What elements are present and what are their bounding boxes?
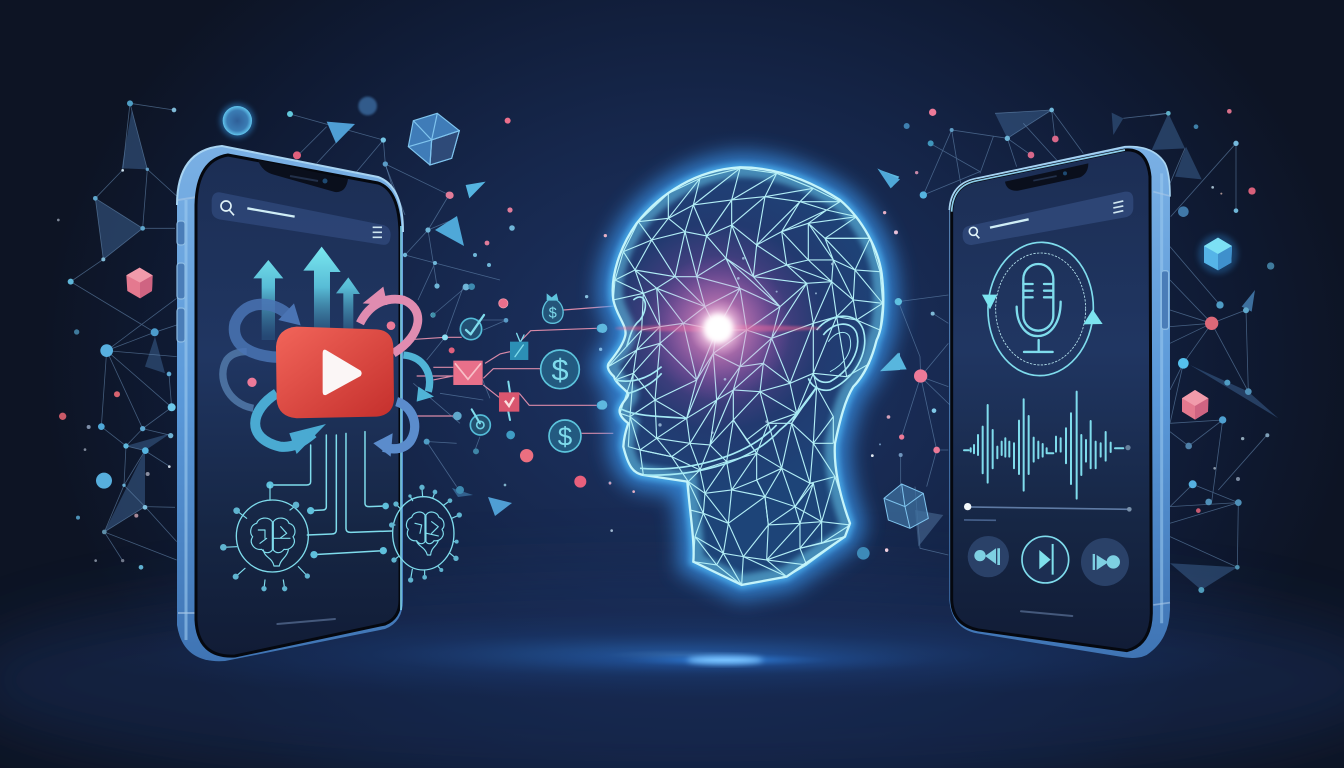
- network: inner right: [871, 295, 950, 555]
- icon: dollar coin small: [549, 420, 581, 452]
- triangle mesh: [608, 168, 883, 585]
- icon: pink check card: [499, 382, 519, 420]
- icon: envelope: [453, 361, 483, 385]
- head: wireframe: [608, 167, 883, 585]
- head glow: [608, 167, 883, 585]
- network: far right: [1150, 109, 1278, 593]
- icon: video play button: [276, 327, 394, 418]
- icon: brain circle left: [220, 485, 310, 591]
- dots around head: [598, 169, 900, 560]
- icon: play next button: [1022, 536, 1069, 583]
- notch: [1005, 163, 1088, 191]
- icon: microphone ring: [982, 241, 1103, 377]
- jaw, lips and ear: [615, 297, 865, 475]
- icon: money bag: [543, 293, 563, 323]
- screen: [952, 150, 1151, 651]
- home bar: [277, 619, 335, 624]
- icon: blue cube: [1198, 234, 1238, 274]
- network: beside left phone: [385, 164, 515, 516]
- side buttons: [177, 221, 185, 342]
- floor glow: [0, 570, 1344, 768]
- search bar: [212, 192, 391, 245]
- inner rim glow: [608, 167, 883, 585]
- icon: target circle: [470, 409, 490, 435]
- growth arrows: [253, 247, 360, 340]
- data icons between phone and head: [413, 283, 615, 494]
- icon: money bag: $: [549, 305, 557, 321]
- notch: [258, 160, 348, 192]
- icon: brain circle right: [389, 485, 462, 583]
- home bar: [1021, 611, 1072, 616]
- network: top right: [877, 108, 1167, 199]
- icon: dollar coin large: $: [551, 353, 569, 387]
- head silhouette: [608, 167, 883, 585]
- brain spark: [615, 255, 822, 402]
- network: top left: [220, 97, 511, 199]
- icon: rewind button: [968, 536, 1009, 577]
- right phone: [949, 147, 1170, 658]
- icon: wireframe hexagon lower right: [884, 484, 928, 528]
- side button: [1161, 271, 1169, 329]
- screen: [196, 155, 400, 656]
- icon: pink cube left: [126, 268, 153, 298]
- network: far left: [57, 100, 177, 570]
- icon: blue wireframe cube top: [408, 113, 459, 165]
- swirl arrows: [223, 299, 430, 449]
- icon: pink cube right: [1182, 390, 1208, 420]
- icon: dollar coin small: $: [558, 421, 573, 451]
- icon: teal note: [510, 333, 528, 360]
- audio waveform: [964, 392, 1123, 499]
- icon: dollar coin large: [541, 350, 579, 389]
- left phone: [177, 146, 462, 661]
- head outline: [608, 167, 883, 585]
- frame: [177, 146, 403, 661]
- icon: forward button: [1081, 538, 1129, 586]
- search bar: [963, 192, 1133, 245]
- circuit lines and brains: [220, 432, 462, 624]
- connector lines: [413, 287, 615, 487]
- icon: check circle: [460, 315, 484, 340]
- progress bar: [964, 503, 1132, 520]
- frame: [949, 147, 1170, 658]
